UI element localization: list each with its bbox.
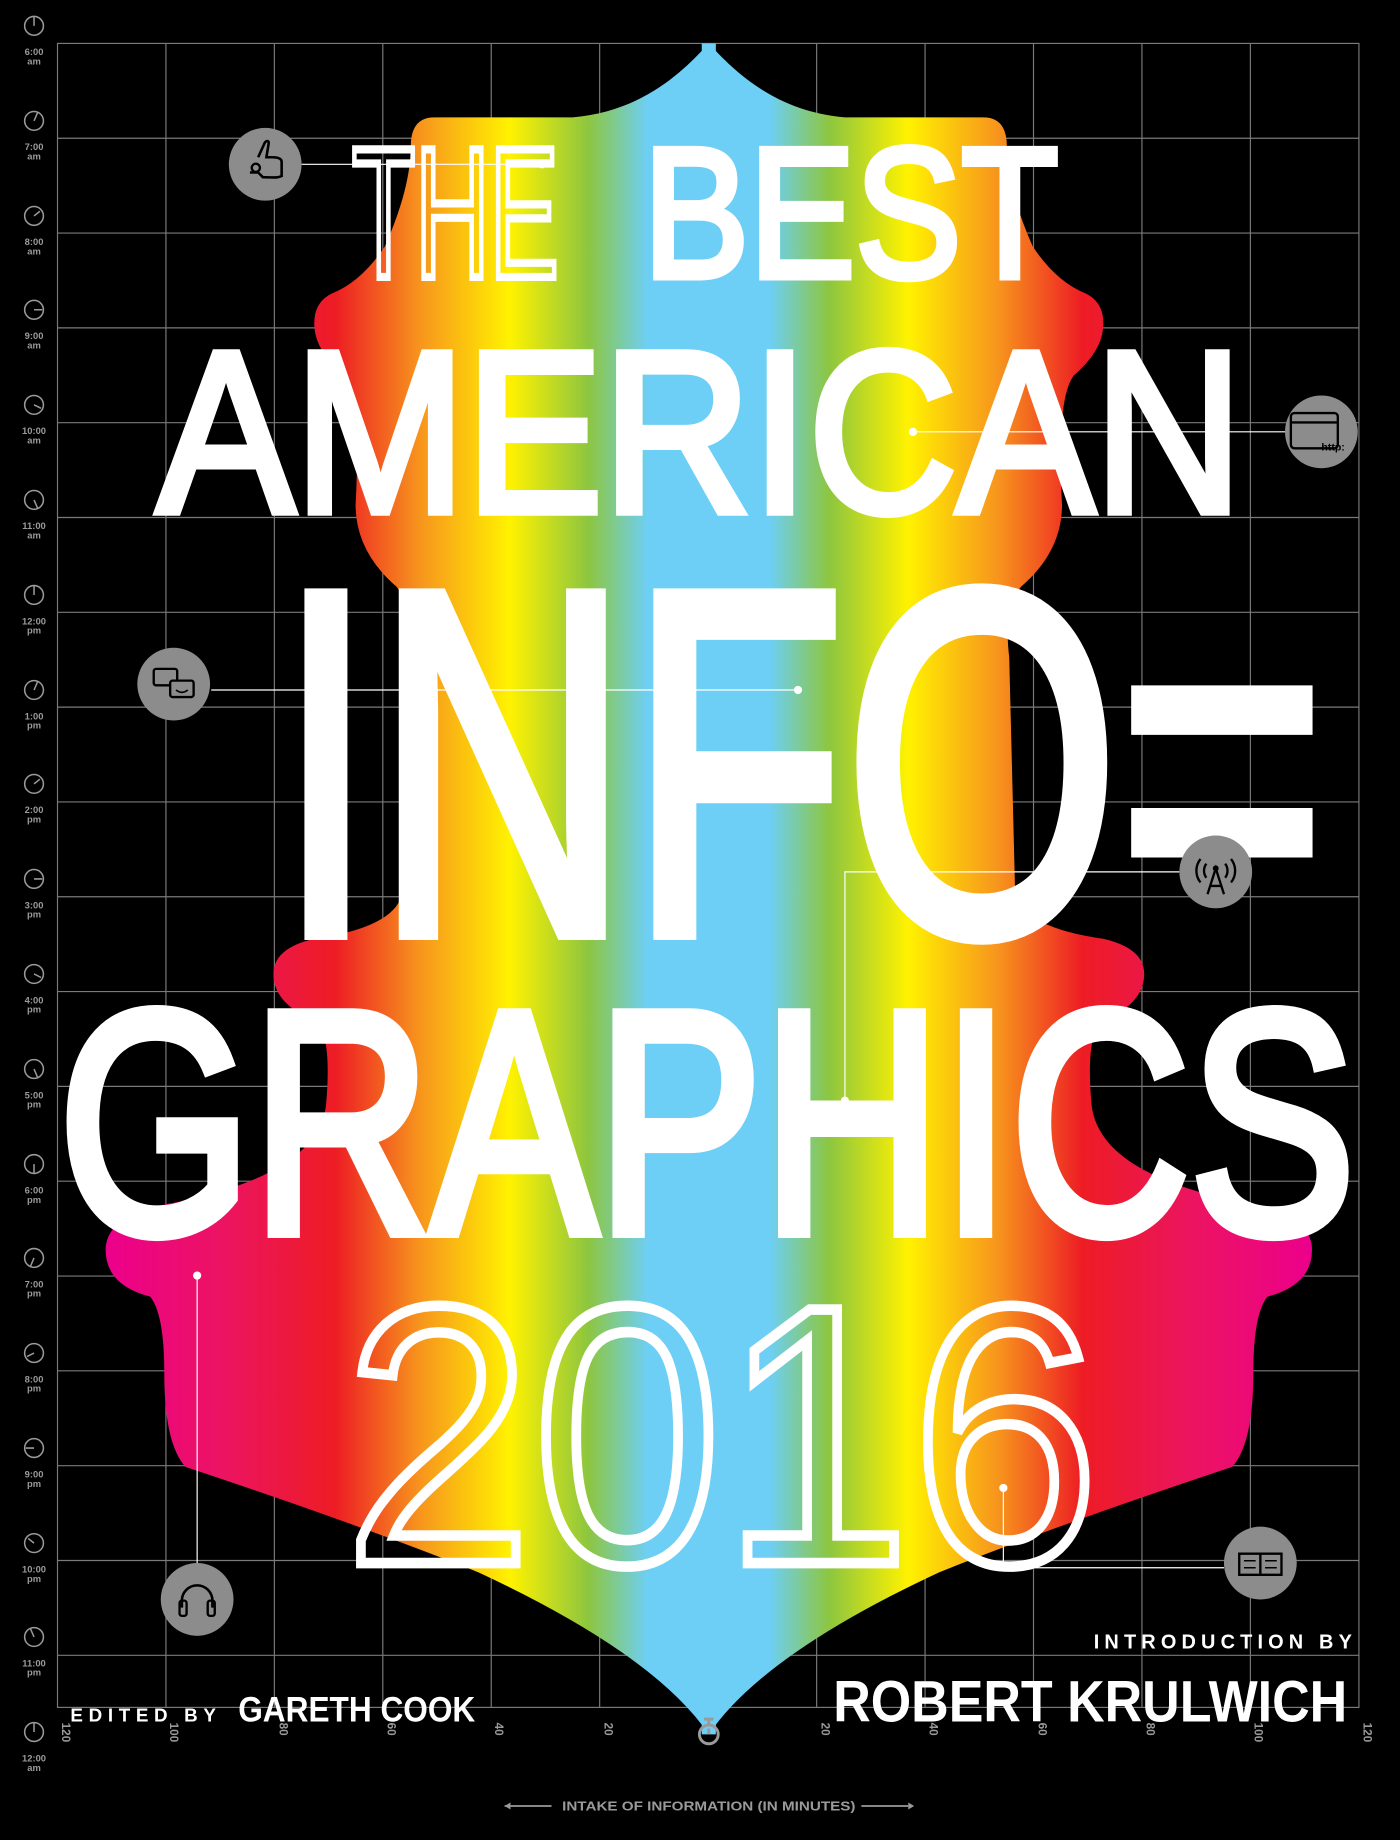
- icon: stopwatch: [699, 1719, 718, 1744]
- time axis (left): 9:00: [25, 331, 43, 341]
- time axis (left): pm: [27, 1384, 41, 1394]
- time axis (left): 12:00: [22, 1753, 46, 1763]
- minutes axis (bottom): 80: [276, 1723, 289, 1736]
- time axis (left): 7:00: [25, 1279, 43, 1289]
- time axis (left): [22, 16, 46, 1773]
- time axis (left): pm: [27, 1668, 41, 1678]
- credit: editor: EDITED BY: [70, 1704, 221, 1725]
- time axis (left): 8:00: [25, 1374, 43, 1384]
- title: 2016: 2016: [344, 1230, 1100, 1642]
- time axis (left): pm: [27, 1195, 41, 1205]
- time axis (left): 5:00: [25, 1090, 43, 1100]
- time axis (left): pm: [27, 1479, 41, 1489]
- minutes axis (bottom): 120: [1361, 1723, 1374, 1743]
- time axis (left): 11:00: [22, 521, 46, 531]
- minutes axis (bottom): 40: [492, 1723, 505, 1736]
- credit: introduction: INTRODUCTION BY: [1094, 1632, 1352, 1654]
- time axis (left): pm: [27, 626, 41, 636]
- icon: antenna: [1179, 836, 1252, 908]
- axis caption: [505, 1799, 914, 1814]
- time axis (left): am: [27, 152, 41, 162]
- minutes axis (bottom): 80: [1144, 1723, 1157, 1736]
- time axis (left): am: [27, 247, 41, 257]
- title: THE: THE: [352, 110, 559, 317]
- time axis (left): am: [27, 531, 41, 541]
- axis caption: INTAKE OF INFORMATION (IN MINUTES): [562, 1799, 855, 1814]
- time axis (left): pm: [27, 910, 41, 920]
- time axis (left): 10:00: [22, 1564, 46, 1574]
- time axis (left): pm: [27, 1100, 41, 1110]
- time axis (left): 6:00: [25, 47, 43, 57]
- time axis (left): 2:00: [25, 805, 43, 815]
- icon: headphones: [161, 1563, 234, 1636]
- time axis (left): 1:00: [25, 711, 43, 721]
- time axis (left): 10:00: [22, 426, 46, 436]
- time axis (left): 4:00: [25, 995, 43, 1005]
- minutes axis (bottom): 60: [384, 1723, 397, 1736]
- time axis (left): 12:00: [22, 616, 46, 626]
- minutes axis (bottom): 100: [1251, 1723, 1264, 1743]
- time axis (left): am: [27, 436, 41, 446]
- time axis (left): am: [27, 341, 41, 351]
- icon: chat bubbles: [137, 648, 210, 721]
- minutes axis (bottom): 120: [59, 1723, 72, 1743]
- credit: editor: GARETH COOK: [238, 1690, 476, 1729]
- title: AMERICAN: AMERICAN: [157, 304, 1243, 561]
- minutes axis (bottom): 60: [1036, 1723, 1049, 1736]
- time axis (left): 7:00: [25, 142, 43, 152]
- title: BEST: BEST: [643, 110, 1059, 317]
- time axis (left): 9:00: [25, 1469, 43, 1479]
- time axis (left): pm: [27, 721, 41, 731]
- time axis (left): 8:00: [25, 237, 43, 247]
- time axis (left): pm: [27, 815, 41, 825]
- credit: introduction: ROBERT KRULWICH: [833, 1669, 1347, 1734]
- icon: http browser: [1285, 395, 1358, 468]
- credit: introduction: [833, 1632, 1352, 1734]
- time axis (left): am: [27, 1763, 41, 1773]
- rainbow silhouette: [106, 43, 1312, 1734]
- icon: thumbs up: [229, 128, 302, 201]
- credit: editor: [70, 1690, 476, 1729]
- minutes axis (bottom): 20: [601, 1723, 614, 1736]
- time axis (left): 6:00: [25, 1185, 43, 1195]
- time axis (left): pm: [27, 1005, 41, 1015]
- time axis (left): 11:00: [22, 1658, 46, 1668]
- minutes axis (bottom): 40: [926, 1723, 939, 1736]
- minutes axis (bottom): [59, 1723, 1374, 1743]
- minutes axis (bottom): 100: [167, 1723, 180, 1743]
- icon: http browser: http:: [1321, 442, 1345, 454]
- time axis (left): pm: [27, 1289, 41, 1299]
- time axis (left): am: [27, 57, 41, 67]
- time axis (left): 3:00: [25, 900, 43, 910]
- minutes axis (bottom): 20: [818, 1723, 831, 1736]
- time axis (left): pm: [27, 1574, 41, 1584]
- icon: book: [1224, 1527, 1297, 1599]
- connector lines: [197, 164, 1285, 1568]
